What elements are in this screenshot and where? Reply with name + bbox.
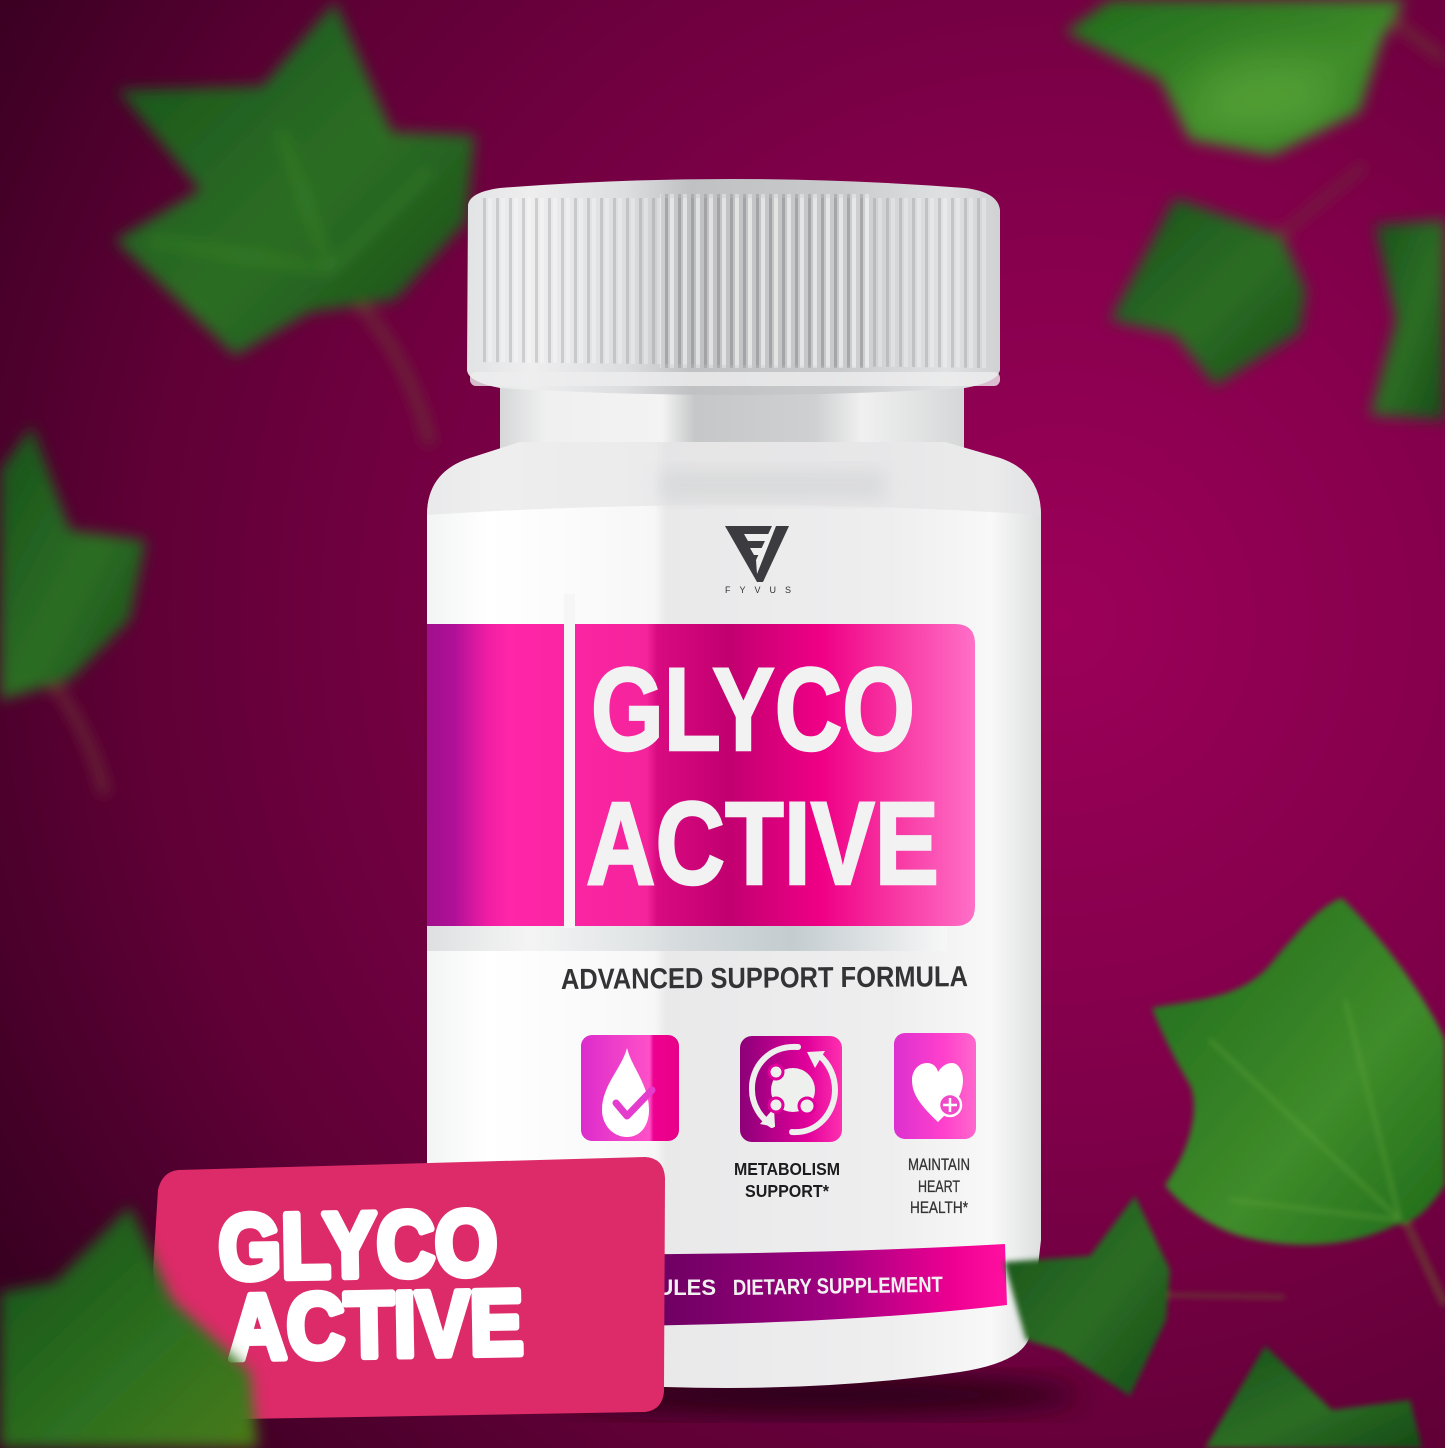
tagline: ADVANCED SUPPORT FORMULA	[561, 961, 968, 996]
heart label: HEART	[918, 1177, 960, 1196]
leaf: bottom left	[0, 1206, 258, 1448]
badge word ACTIVE: ACTIVE	[228, 1272, 524, 1379]
shoulder shading	[427, 442, 1041, 515]
leaf: top right	[1065, 0, 1445, 156]
capsule count: 60 CAPSULES	[566, 1275, 716, 1300]
leaf: bottle lower right	[1004, 1196, 1285, 1396]
shadow under bottle	[560, 1375, 1080, 1415]
product name: GLYCO: GLYCO	[591, 644, 915, 776]
icon: heart with plus	[894, 1033, 976, 1139]
band divider	[564, 594, 575, 928]
badge word GLYCO: GLYCO	[218, 1192, 498, 1299]
heart label	[908, 1155, 970, 1217]
metabolism label: SUPPORT*	[745, 1181, 829, 1201]
metabolism label	[734, 1159, 840, 1201]
logo: Fyvus	[725, 526, 791, 595]
logo: Fyvus: FYVUS	[725, 585, 791, 595]
leaf: bottom right	[1205, 1346, 1422, 1448]
badge: Glyco Active	[153, 1157, 665, 1420]
product name: ACTIVE: ACTIVE	[586, 778, 939, 910]
leaf: lower right large	[1152, 898, 1445, 1305]
leaf: right edge	[1370, 220, 1445, 420]
dietary supplement: DIETARY SUPPLEMENT	[733, 1272, 944, 1300]
leaf: top left	[115, 2, 475, 445]
icon: water drop with check	[581, 1035, 679, 1141]
leaf: left	[0, 426, 146, 795]
heart label: MAINTAIN	[908, 1155, 970, 1174]
bottle body	[427, 442, 1041, 1388]
shoulder highlight	[660, 470, 885, 500]
bottle neck	[500, 385, 964, 460]
metabolism label: METABOLISM	[734, 1159, 840, 1179]
lower purple band	[427, 1244, 1007, 1327]
silver strip under band	[427, 925, 947, 951]
icon: metabolism cycle	[740, 1036, 842, 1142]
heart label: HEALTH*	[910, 1198, 968, 1217]
pink label band	[427, 624, 975, 926]
cap	[467, 179, 1000, 395]
bottle	[427, 179, 1080, 1415]
leaf: right middle	[1110, 165, 1365, 386]
